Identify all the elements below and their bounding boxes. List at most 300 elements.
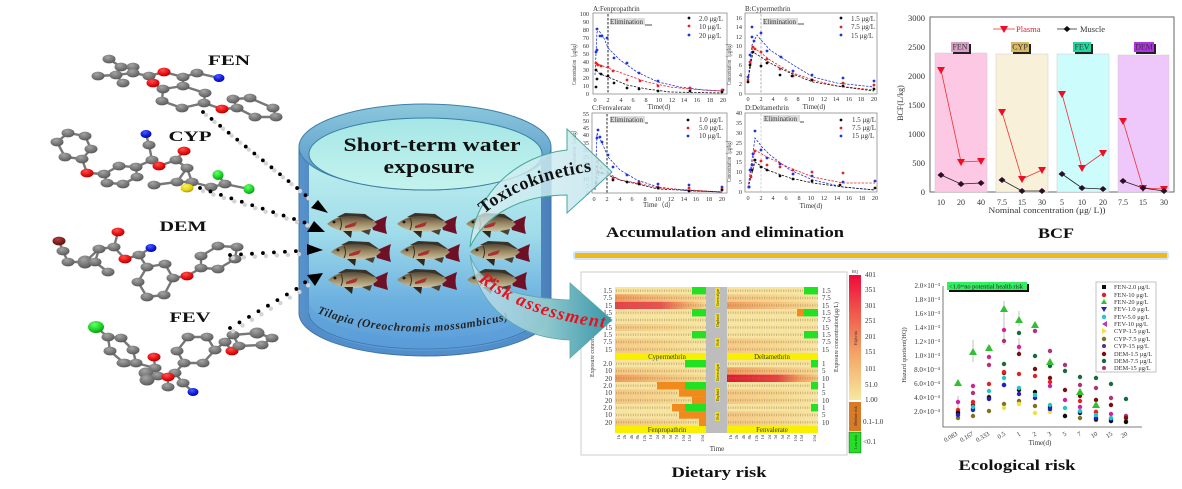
center time band xyxy=(706,287,727,433)
arrow label: Toxicokinetics xyxy=(477,162,591,212)
legend: FEN-10 μg/L xyxy=(1114,292,1149,299)
risk color legend: Low risk xyxy=(854,435,858,449)
chart C: Fenvalerate: 10 μg/L xyxy=(699,132,721,140)
arrow label: Risk assessment xyxy=(478,272,606,328)
chart B: Cypermethrin: 10 xyxy=(736,43,742,50)
time labels: 12h xyxy=(642,434,647,442)
divider xyxy=(573,251,1169,260)
row labels: 10 xyxy=(605,411,612,419)
chart: BCF: 7.5 xyxy=(1118,198,1128,207)
risk color legend: 101 xyxy=(865,365,876,373)
chart B: Cypermethrin: 0 xyxy=(746,96,750,103)
chart C: Fenvalerate: 16 xyxy=(693,196,699,203)
heading: BCF: BCF xyxy=(1038,226,1074,242)
row labels: 7.5 xyxy=(603,338,612,346)
row labels: 20 xyxy=(605,397,612,405)
chart C: Fenvalerate: 12 xyxy=(668,196,674,203)
time labels: 5d xyxy=(780,434,785,439)
chart B: Cypermethrin: 16 xyxy=(846,96,852,103)
chart B: Cypermethrin: 8 xyxy=(796,96,800,103)
panel: dietary risk heatmap: 7.5 xyxy=(822,338,831,346)
row labels: 15 xyxy=(605,302,612,310)
fish: nine tilapia xyxy=(327,213,530,294)
compound tags: FEN xyxy=(952,42,968,52)
legend: CYP-1.5 μg/L xyxy=(1114,328,1151,335)
chart: BCF: 3000 xyxy=(908,13,925,23)
chart D: Deltamethrin xyxy=(726,104,878,210)
chart A: Fenpropathrin: 10 xyxy=(656,97,662,104)
chart D: Deltamethrin: 15 μg/L xyxy=(852,132,874,140)
chart A: Fenpropathrin: 60 xyxy=(583,43,589,50)
legend: FEV-1.0 μg/L xyxy=(1114,306,1150,313)
risk color legend: 351 xyxy=(865,286,876,294)
cell value texture xyxy=(616,291,818,422)
chart A: Fenpropathrin: 2.0 μg/L xyxy=(699,15,723,23)
time labels: 3d xyxy=(773,434,778,439)
species label: Tilapia (Oreochromis mossambicus) xyxy=(318,306,507,332)
chart B: Cypermethrin xyxy=(726,5,877,111)
risk color legend: 151 xyxy=(865,348,876,356)
chart C: Fenvalerate: 40 xyxy=(583,132,589,139)
chart D: Deltamethrin: 10 xyxy=(736,169,742,176)
chart A: Fenpropathrin: A:Fenpropathrin xyxy=(593,5,640,13)
chart: BCF: 20 xyxy=(957,198,965,207)
panel: dietary risk heatmap: Daphnid xyxy=(716,389,720,401)
row labels: 2.0 xyxy=(603,360,612,368)
chart: ecological risk: 1 xyxy=(1016,431,1022,438)
chart B: Cypermethrin: 20 xyxy=(871,96,877,103)
time labels: 2h xyxy=(734,434,739,439)
chart: ecological risk: 1.4×10⁻³ xyxy=(914,324,940,332)
chart D: Deltamethrin: 16 xyxy=(846,195,852,202)
legend: DEM-15 μg/L xyxy=(1114,365,1151,372)
chart: BCF: 10 xyxy=(1078,198,1086,207)
chart D: Deltamethrin: 4 xyxy=(771,195,775,202)
chart B: Cypermethrin: 8 xyxy=(739,53,742,60)
risk color legend xyxy=(849,269,884,453)
chart D: Deltamethrin: 2 xyxy=(759,195,763,202)
chart C: Fenvalerate: 8 xyxy=(643,196,647,203)
risk threshold note xyxy=(947,282,1029,292)
label: DEM: DEM xyxy=(160,219,206,235)
chart: BCF: 500 xyxy=(912,158,925,168)
chart B: Cypermethrin: 6 xyxy=(739,62,742,69)
panel: dietary risk heatmap: 1 xyxy=(822,404,826,412)
panel: dietary risk heatmap: 1 xyxy=(822,360,826,368)
chart C: Fenvalerate: 45 xyxy=(583,125,589,132)
panel: dietary risk heatmap: 1.5 xyxy=(822,331,831,339)
heading: ecological risk: Ecological risk xyxy=(958,458,1076,474)
row labels: 15 xyxy=(605,346,612,354)
chart: BCF: 0 xyxy=(921,187,925,197)
chart A: Fenpropathrin: 18 xyxy=(707,97,713,104)
time labels: 7d xyxy=(674,434,679,439)
chart: BCF: 40 xyxy=(977,198,985,207)
chart B: Cypermethrin: 18 xyxy=(858,96,864,103)
chart: ecological risk: 5 xyxy=(1062,431,1068,438)
chart B: Cypermethrin: 4 xyxy=(739,72,742,79)
chart B: Cypermethrin: 4 xyxy=(771,96,775,103)
panel: dietary risk heatmap: Fenvalerate xyxy=(756,427,788,434)
chart A: Fenpropathrin: 20 xyxy=(583,75,589,82)
chart D: Deltamethrin: 40 xyxy=(736,110,742,117)
chart A: Fenpropathrin: 100 xyxy=(580,11,589,18)
chart A: Fenpropathrin: Elimination xyxy=(610,18,644,26)
arrow: toxicokinetics xyxy=(470,128,613,248)
panel: dietary risk heatmap: 7.5 xyxy=(822,316,831,324)
chart C: Fenvalerate: Concentration（μg/kg） xyxy=(571,128,578,172)
row labels xyxy=(603,287,612,427)
chart A: Fenpropathrin: Time(d) xyxy=(648,103,671,111)
time labels: 8h xyxy=(635,434,640,439)
chart B: Cypermethrin: 15 μg/L xyxy=(851,32,873,40)
chart B: Cypermethrin: 14 xyxy=(736,24,742,31)
chart: BCF: 30 xyxy=(1160,198,1168,207)
panel: dietary risk heatmap: 15 xyxy=(822,324,830,332)
chart A: Fenpropathrin: 90 xyxy=(583,19,589,26)
panel: dietary risk heatmap xyxy=(581,269,884,455)
row labels: 1.5 xyxy=(603,309,612,317)
legend: DEM-1.5 μg/L xyxy=(1114,351,1152,358)
chart C: Fenvalerate: Time（d） xyxy=(643,201,675,209)
chart: ecological risk: 15 xyxy=(1105,431,1114,440)
chart C: Fenvalerate: 4 xyxy=(618,196,622,203)
molecule: FEN xyxy=(92,55,282,121)
compound tags: CYP xyxy=(1012,42,1028,52)
time labels: 2h xyxy=(622,434,627,439)
molecule: CYP xyxy=(50,129,254,194)
chart D: Deltamethrin: 20 xyxy=(872,195,878,202)
chart D: Deltamethrin: Concentration（μg/kg） xyxy=(726,138,733,182)
chart: ecological risk: 1.6×10⁻³ xyxy=(914,310,940,318)
chart C: Fenvalerate: 1.0 μg/L xyxy=(699,116,723,124)
time labels: 2d xyxy=(655,434,660,439)
chart: ecological risk: 7 xyxy=(1077,430,1084,438)
chart: ecological risk: 6.0×10⁻⁴ xyxy=(914,380,941,388)
chart A: Fenpropathrin: 2 xyxy=(606,97,610,104)
error bars xyxy=(958,301,1019,408)
chart C: Fenvalerate: 5.0 μg/L xyxy=(699,124,723,132)
chart D: Deltamethrin: 0 xyxy=(746,195,750,202)
time labels: 10d xyxy=(793,434,798,442)
panel: dietary risk heatmap: 10 xyxy=(822,419,830,427)
low and medium risk cells xyxy=(657,287,818,426)
chart B: Cypermethrin: 0 xyxy=(739,91,742,98)
panel: dietary risk heatmap: 1 xyxy=(822,382,826,390)
risk color legend: <0.1 xyxy=(863,438,876,446)
chart B: Cypermethrin: 12 xyxy=(736,34,742,41)
row labels: 1.5 xyxy=(603,287,612,295)
chart: ecological risk: 2.0×10⁻⁴ xyxy=(914,408,941,416)
chart B: Cypermethrin: 16 xyxy=(736,15,742,22)
risk color legend: 0.1-1.0 xyxy=(863,418,884,426)
chart: BCF: 20 xyxy=(1099,198,1107,207)
chart: ecological risk: Time(d) xyxy=(1029,439,1052,447)
chart: BCF: 15 xyxy=(1018,198,1026,207)
chart C: Fenvalerate: 10 xyxy=(583,176,589,183)
chart C: Fenvalerate: 18 xyxy=(706,196,712,203)
time labels xyxy=(616,434,817,442)
chart B: Cypermethrin: 2 xyxy=(759,96,763,103)
panel: dietary risk heatmap: Daphnid xyxy=(716,314,720,327)
chart: ecological risk: Hazard quotient(HQ) xyxy=(901,327,908,383)
row labels: 10 xyxy=(605,367,612,375)
panel: dietary risk heatmap: Green algae xyxy=(716,288,720,306)
chart A: Fenpropathrin: 40 xyxy=(583,59,589,66)
panel: dietary risk heatmap: Green algae xyxy=(716,363,720,381)
time labels: 15d xyxy=(687,434,692,442)
chart A: Fenpropathrin: 12 xyxy=(669,97,675,104)
row labels: 10 xyxy=(605,389,612,397)
panel: dietary risk heatmap: 10 xyxy=(822,397,830,405)
time labels: 4h xyxy=(629,434,634,439)
chart D: Deltamethrin: 20 xyxy=(736,150,742,157)
panel: dietary risk heatmap: 7.5 xyxy=(822,294,831,302)
chart D: Deltamethrin: 8 xyxy=(797,195,801,202)
time labels: 1h xyxy=(616,434,621,439)
legend: FEV-5.0 μg/L xyxy=(1114,314,1150,321)
legend: CYP-7.5 μg/L xyxy=(1114,336,1151,343)
chart: BCF: 15 xyxy=(1139,198,1147,207)
legend: Plasma xyxy=(1016,24,1041,34)
panel: dietary risk heatmap: Fish xyxy=(716,413,720,420)
chart C: Fenvalerate: 2 xyxy=(605,196,609,203)
chart A: Fenpropathrin: 0 xyxy=(593,97,597,104)
chart: BCF: 1500 xyxy=(908,100,925,110)
tank title: Short-term water xyxy=(344,135,521,156)
molecule: FEV xyxy=(88,321,278,396)
panel: dietary risk heatmap: 1.5 xyxy=(822,309,831,317)
chart A: Fenpropathrin: 70 xyxy=(583,35,589,42)
row labels: 1.5 xyxy=(603,331,612,339)
chart: BCF: Nominal concentration (μg/ L)) xyxy=(988,205,1106,215)
risk color legend: 1.00 xyxy=(865,396,878,404)
time labels: 4h xyxy=(741,434,746,439)
label: CYP: CYP xyxy=(168,129,212,145)
chart: BCF: 10 xyxy=(937,198,945,207)
arrow: risk assessment xyxy=(470,254,612,359)
panel: dietary risk heatmap: Fenpropathrin xyxy=(648,427,687,434)
tank: water exposure cylinder: exposure xyxy=(384,157,474,178)
chart: ecological risk xyxy=(901,282,1156,447)
risk color legend: High risk xyxy=(854,331,858,345)
panel: dietary risk heatmap: Time xyxy=(710,445,724,453)
chart C: Fenvalerate: 20 xyxy=(719,196,725,203)
time labels: 5d xyxy=(668,434,673,439)
chart: BCF: 2500 xyxy=(908,42,925,52)
chart B: Cypermethrin: Elimination xyxy=(763,18,797,26)
risk color legend: 301 xyxy=(865,302,876,310)
legend: FEN-20 μg/L xyxy=(1114,299,1149,306)
panel: dietary risk heatmap: Fish xyxy=(716,339,720,346)
chart A: Fenpropathrin: Concentration（μg/kg） xyxy=(571,41,578,85)
panel: dietary risk heatmap: Deltamethrin xyxy=(754,354,791,361)
chart: ecological risk: 0.333 xyxy=(975,431,991,444)
chart: ecological risk: 1.0×10⁻³ xyxy=(914,352,940,360)
chart A: Fenpropathrin: 20 μg/L xyxy=(699,32,721,40)
legend xyxy=(1096,282,1156,372)
heading: dietary risk: Dietary risk xyxy=(672,465,767,481)
chart: BCF: 1000 xyxy=(908,129,925,139)
chart: BCF: BCF(L/kg) xyxy=(896,85,905,121)
chart C: Fenvalerate: 25 xyxy=(583,154,589,161)
risk color legend: 401 xyxy=(865,271,876,279)
chart: ecological risk: 1.2×10⁻³ xyxy=(914,338,940,346)
chart D: Deltamethrin: 25 xyxy=(736,140,742,147)
chart B: Cypermethrin: Time(d) xyxy=(803,103,826,111)
chart C: Fenvalerate: 30 xyxy=(583,147,589,154)
chart A: Fenpropathrin: 8 xyxy=(644,97,648,104)
row labels: 2.0 xyxy=(603,404,612,412)
chart A: Fenpropathrin: 80 xyxy=(583,27,589,34)
legend: FEN-2.0 μg/L xyxy=(1114,284,1150,291)
legend xyxy=(993,24,1105,34)
tank: water exposure cylinder xyxy=(299,104,551,356)
chart: ecological risk: 8.0×10⁻⁴ xyxy=(914,366,941,374)
compound tags: DEM xyxy=(1135,42,1153,52)
risk color legend: RQ xyxy=(852,269,859,274)
chart D: Deltamethrin: Elimination xyxy=(764,115,798,123)
chart C: Fenvalerate: 10 xyxy=(655,196,661,203)
heading: accumulation and elimination: Accumulation and elimination xyxy=(606,225,845,241)
time labels: 2d xyxy=(767,434,772,439)
legend: DEM-7.5 μg/L xyxy=(1114,358,1152,365)
chart C: Fenvalerate: 14 xyxy=(681,196,687,203)
chart C: Fenvalerate: C:Fenvalerate xyxy=(592,104,631,112)
legend: Muscle xyxy=(1080,24,1105,34)
row labels: 7.5 xyxy=(603,294,612,302)
chart: BCF: 30 xyxy=(1038,198,1046,207)
time labels: 12h xyxy=(754,434,759,442)
panel: dietary risk heatmap: 5 xyxy=(822,367,826,375)
panel: dietary risk heatmap: 15 xyxy=(822,302,830,310)
chart A: Fenpropathrin: 30 xyxy=(583,67,589,74)
chart A: Fenpropathrin: 4 xyxy=(619,97,623,104)
panel: dietary risk heatmap: 10 xyxy=(822,375,830,383)
time labels: 1h xyxy=(728,434,733,439)
time labels: 15d xyxy=(799,434,804,442)
chart B: Cypermethrin: 12 xyxy=(821,96,827,103)
compound header bands xyxy=(615,353,818,433)
chart: ecological risk: 0.083 xyxy=(943,431,959,444)
time labels: 10d xyxy=(681,434,686,442)
chart D: Deltamethrin: 10 xyxy=(808,195,814,202)
chart C: Fenvalerate: 15 xyxy=(583,168,589,175)
legend: CYP-15 μg/L xyxy=(1114,343,1149,350)
chart D: Deltamethrin: 6 xyxy=(784,195,788,202)
heatmap left cells xyxy=(615,287,706,426)
chart A: Fenpropathrin: 50 xyxy=(583,51,589,58)
chart D: Deltamethrin: 35 xyxy=(736,120,742,127)
panel: dietary risk heatmap: 15 xyxy=(822,346,830,354)
chart C: Fenvalerate: 20 xyxy=(583,161,589,168)
time labels: 8h xyxy=(747,434,752,439)
chart C: Fenvalerate: 0 xyxy=(592,196,596,203)
chart: ecological risk: 1.8×10⁻³ xyxy=(914,296,940,304)
chart D: Deltamethrin: D:Deltamethrin xyxy=(745,104,789,112)
chart: ecological risk: 3 xyxy=(1047,431,1053,438)
risk color legend: Medium risk xyxy=(854,406,858,426)
chart B: Cypermethrin: 10 xyxy=(808,96,814,103)
row labels: 20 xyxy=(605,419,612,427)
chart: ecological risk: 0.167 xyxy=(959,430,976,444)
chart A: Fenpropathrin: 10 μg/L xyxy=(699,23,721,31)
risk threshold note: <1.0=no potential health risk xyxy=(949,284,1024,290)
row labels: 7.5 xyxy=(603,316,612,324)
time labels: 1d xyxy=(648,434,653,439)
chart A: Fenpropathrin: 6 xyxy=(631,97,635,104)
chart: BCF: 7.5 xyxy=(997,198,1007,207)
chart D: Deltamethrin: 5 xyxy=(739,179,742,186)
dotted arrows: compounds entering the tank xyxy=(200,112,328,331)
chart C: Fenvalerate: 6 xyxy=(630,196,634,203)
risk color legend: 51.0 xyxy=(865,381,878,389)
chart A: Fenpropathrin: 10 xyxy=(583,83,589,90)
chart C: Fenvalerate: 55 xyxy=(583,111,589,118)
chart D: Deltamethrin: 12 xyxy=(821,195,827,202)
chart: ecological risk: 2 xyxy=(1032,431,1038,438)
chart A: Fenpropathrin: 20 xyxy=(720,97,726,104)
legend: FEV-10 μg/L xyxy=(1114,321,1148,328)
row labels: 2.0 xyxy=(603,382,612,390)
chart D: Deltamethrin: 30 xyxy=(736,130,742,137)
chart D: Deltamethrin: 0 xyxy=(739,189,742,196)
panel: dietary risk heatmap: Exposure concentration(μg/L) xyxy=(833,302,840,372)
chart D: Deltamethrin: Time(d) xyxy=(800,202,823,210)
compound tags: FEV xyxy=(1074,42,1090,52)
chart: ecological risk: 2.0×10⁻³ xyxy=(914,282,940,290)
panel: dietary risk heatmap: 5 xyxy=(822,411,826,419)
risk color legend: 251 xyxy=(865,317,876,325)
panel: dietary risk heatmap: 5 xyxy=(822,389,826,397)
chart D: Deltamethrin: 15 xyxy=(736,159,742,166)
chart C: Fenvalerate xyxy=(571,104,727,209)
chart: ecological risk: 10 xyxy=(1090,431,1099,440)
time labels: 1d xyxy=(760,434,765,439)
panel: dietary risk heatmap: Cypermethrin xyxy=(648,354,686,361)
compound tags xyxy=(951,42,1156,54)
row labels: 15 xyxy=(605,324,612,332)
chart: ecological risk: 4.0×10⁻⁴ xyxy=(914,394,941,402)
chart D: Deltamethrin: 7.5 μg/L xyxy=(852,124,876,132)
scatter points xyxy=(958,401,1126,421)
chart: BCF: 5 xyxy=(1060,198,1064,207)
chart B: Cypermethrin: 1.5 μg/L xyxy=(851,15,875,23)
chart A: Fenpropathrin: 14 xyxy=(681,97,687,104)
chart C: Fenvalerate: 50 xyxy=(583,118,589,125)
chart B: Cypermethrin: 2 xyxy=(739,81,742,88)
chart B: Cypermethrin: 6 xyxy=(784,96,788,103)
chart D: Deltamethrin: 14 xyxy=(834,195,840,202)
time labels: 3d xyxy=(661,434,666,439)
chart A: Fenpropathrin: 0 xyxy=(586,91,589,98)
chart C: Fenvalerate: 0 xyxy=(586,190,589,197)
chart: BCF xyxy=(896,13,1174,215)
chart B: Cypermethrin: Concentration（μg/kg） xyxy=(726,41,733,85)
chart D: Deltamethrin: 18 xyxy=(859,195,865,202)
molecule: DEM xyxy=(52,228,244,301)
chart: ecological risk: 20 xyxy=(1120,431,1129,440)
panel: dietary risk heatmap: Exposure concentration(μg/L) xyxy=(589,307,596,377)
time labels: 20d xyxy=(700,434,705,442)
label: FEN: FEN xyxy=(208,53,250,69)
chart C: Fenvalerate: 5 xyxy=(586,183,589,190)
heatmap right cells xyxy=(727,287,818,426)
risk color legend: 201 xyxy=(865,333,876,341)
chart C: Fenvalerate: 35 xyxy=(583,140,589,147)
chart C: Fenvalerate: Elimination xyxy=(610,116,644,124)
chart B: Cypermethrin: 7.5 μg/L xyxy=(851,23,875,31)
